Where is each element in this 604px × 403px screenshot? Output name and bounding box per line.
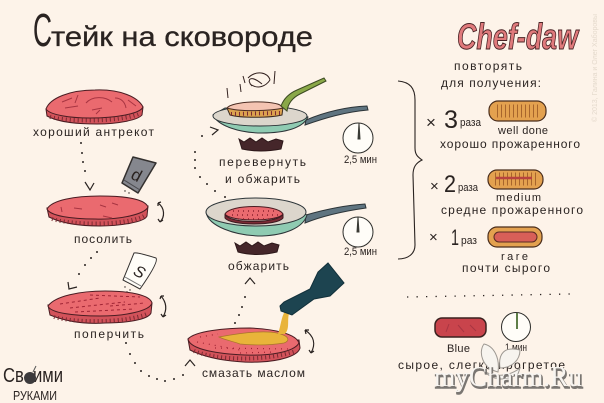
step 5: pan with steak (206, 198, 366, 236)
row: rare: почти сырого (462, 261, 550, 275)
label: timer 2: 2,5 мин (344, 246, 377, 258)
label: fry: обжарить (228, 259, 289, 273)
icon: salt shaker (122, 157, 156, 194)
watermark: myCharm.Ru (434, 361, 582, 393)
title: С (33, 4, 52, 56)
brace (398, 81, 422, 259)
row: medium (430, 170, 583, 217)
label: pepper: поперчить (74, 327, 144, 341)
step 6: pan with flipped steak (213, 71, 368, 133)
row: medium: раза (458, 182, 479, 194)
label: flip and fry: и обжарить (225, 172, 300, 186)
step 2: salted steak (47, 196, 148, 226)
title (33, 4, 313, 56)
row: rare: 1 (451, 225, 459, 250)
intro text: для получения: (441, 76, 541, 90)
copyright: © 2013, Галина и Олег Хаборовы (591, 14, 599, 122)
step 1: raw steak (46, 90, 143, 124)
icon: burner 2 (235, 242, 279, 254)
arrow: step 4 to step 5 (234, 278, 255, 324)
row: medium: × (430, 178, 439, 195)
logo: made by hand: Своими (3, 365, 63, 387)
label: grease with oil: смазать маслом (202, 366, 305, 380)
row: rare (429, 225, 550, 275)
label: flip and fry: перевернуть (219, 155, 306, 169)
row: blue: 1 мин (505, 342, 527, 354)
arrow: step 2 to step 3 (68, 251, 98, 289)
row: blue: сырое, слегка прогретое (398, 358, 565, 372)
icon: timer 2 (343, 217, 373, 247)
step 4: steak with butter (188, 311, 300, 362)
intro text (441, 59, 541, 90)
row: blue (398, 312, 565, 372)
arrow: step 5 to step 6 (194, 127, 226, 198)
intro text: повторять (454, 59, 522, 73)
row: well done: well done (497, 125, 548, 137)
row: rare: × (429, 229, 438, 246)
icon: oil bottle (280, 263, 344, 315)
logo: made by hand (3, 365, 63, 403)
arrow: step 3 to step 4 (125, 342, 195, 382)
icon: pepper shaker: S (130, 263, 148, 283)
arrow: step 1 to step 2 (80, 142, 94, 190)
step 3: peppered steak (48, 291, 152, 323)
watermark: myCharm.Ru (435, 363, 583, 395)
row: well done: раза (460, 117, 482, 129)
row: well done (426, 101, 580, 151)
label: timer 1: 2,5 мин (344, 154, 377, 166)
row: rare: rare (501, 251, 528, 263)
title: тейк на сковороде (51, 21, 313, 52)
icon: pepper shaker (123, 253, 156, 293)
row: blue: Blue (447, 343, 470, 355)
label: salt: посолить (74, 232, 132, 246)
row: well done: 3 (444, 106, 458, 134)
icon: curved arrow (305, 330, 314, 353)
icon: salt shaker: d (128, 165, 145, 186)
row: well done: хорошо прожаренного (440, 137, 580, 151)
icon: burner 1 (239, 138, 283, 151)
logo: made by hand: РУКАМИ (13, 388, 57, 403)
row: well done: × (426, 113, 436, 132)
icon: curved arrow (160, 296, 166, 317)
icon: timer 1 (343, 123, 373, 153)
icon: curved arrow (158, 202, 164, 222)
row: rare: раз (461, 235, 477, 247)
row: medium: средне прожаренного (441, 203, 583, 217)
watermark (434, 344, 583, 395)
row: medium: medium (496, 192, 541, 204)
dotted divider (407, 294, 570, 297)
label: flip and fry (219, 155, 306, 186)
label: good entrecote: хороший антрекот (33, 125, 154, 139)
row: medium: 2 (444, 171, 456, 198)
